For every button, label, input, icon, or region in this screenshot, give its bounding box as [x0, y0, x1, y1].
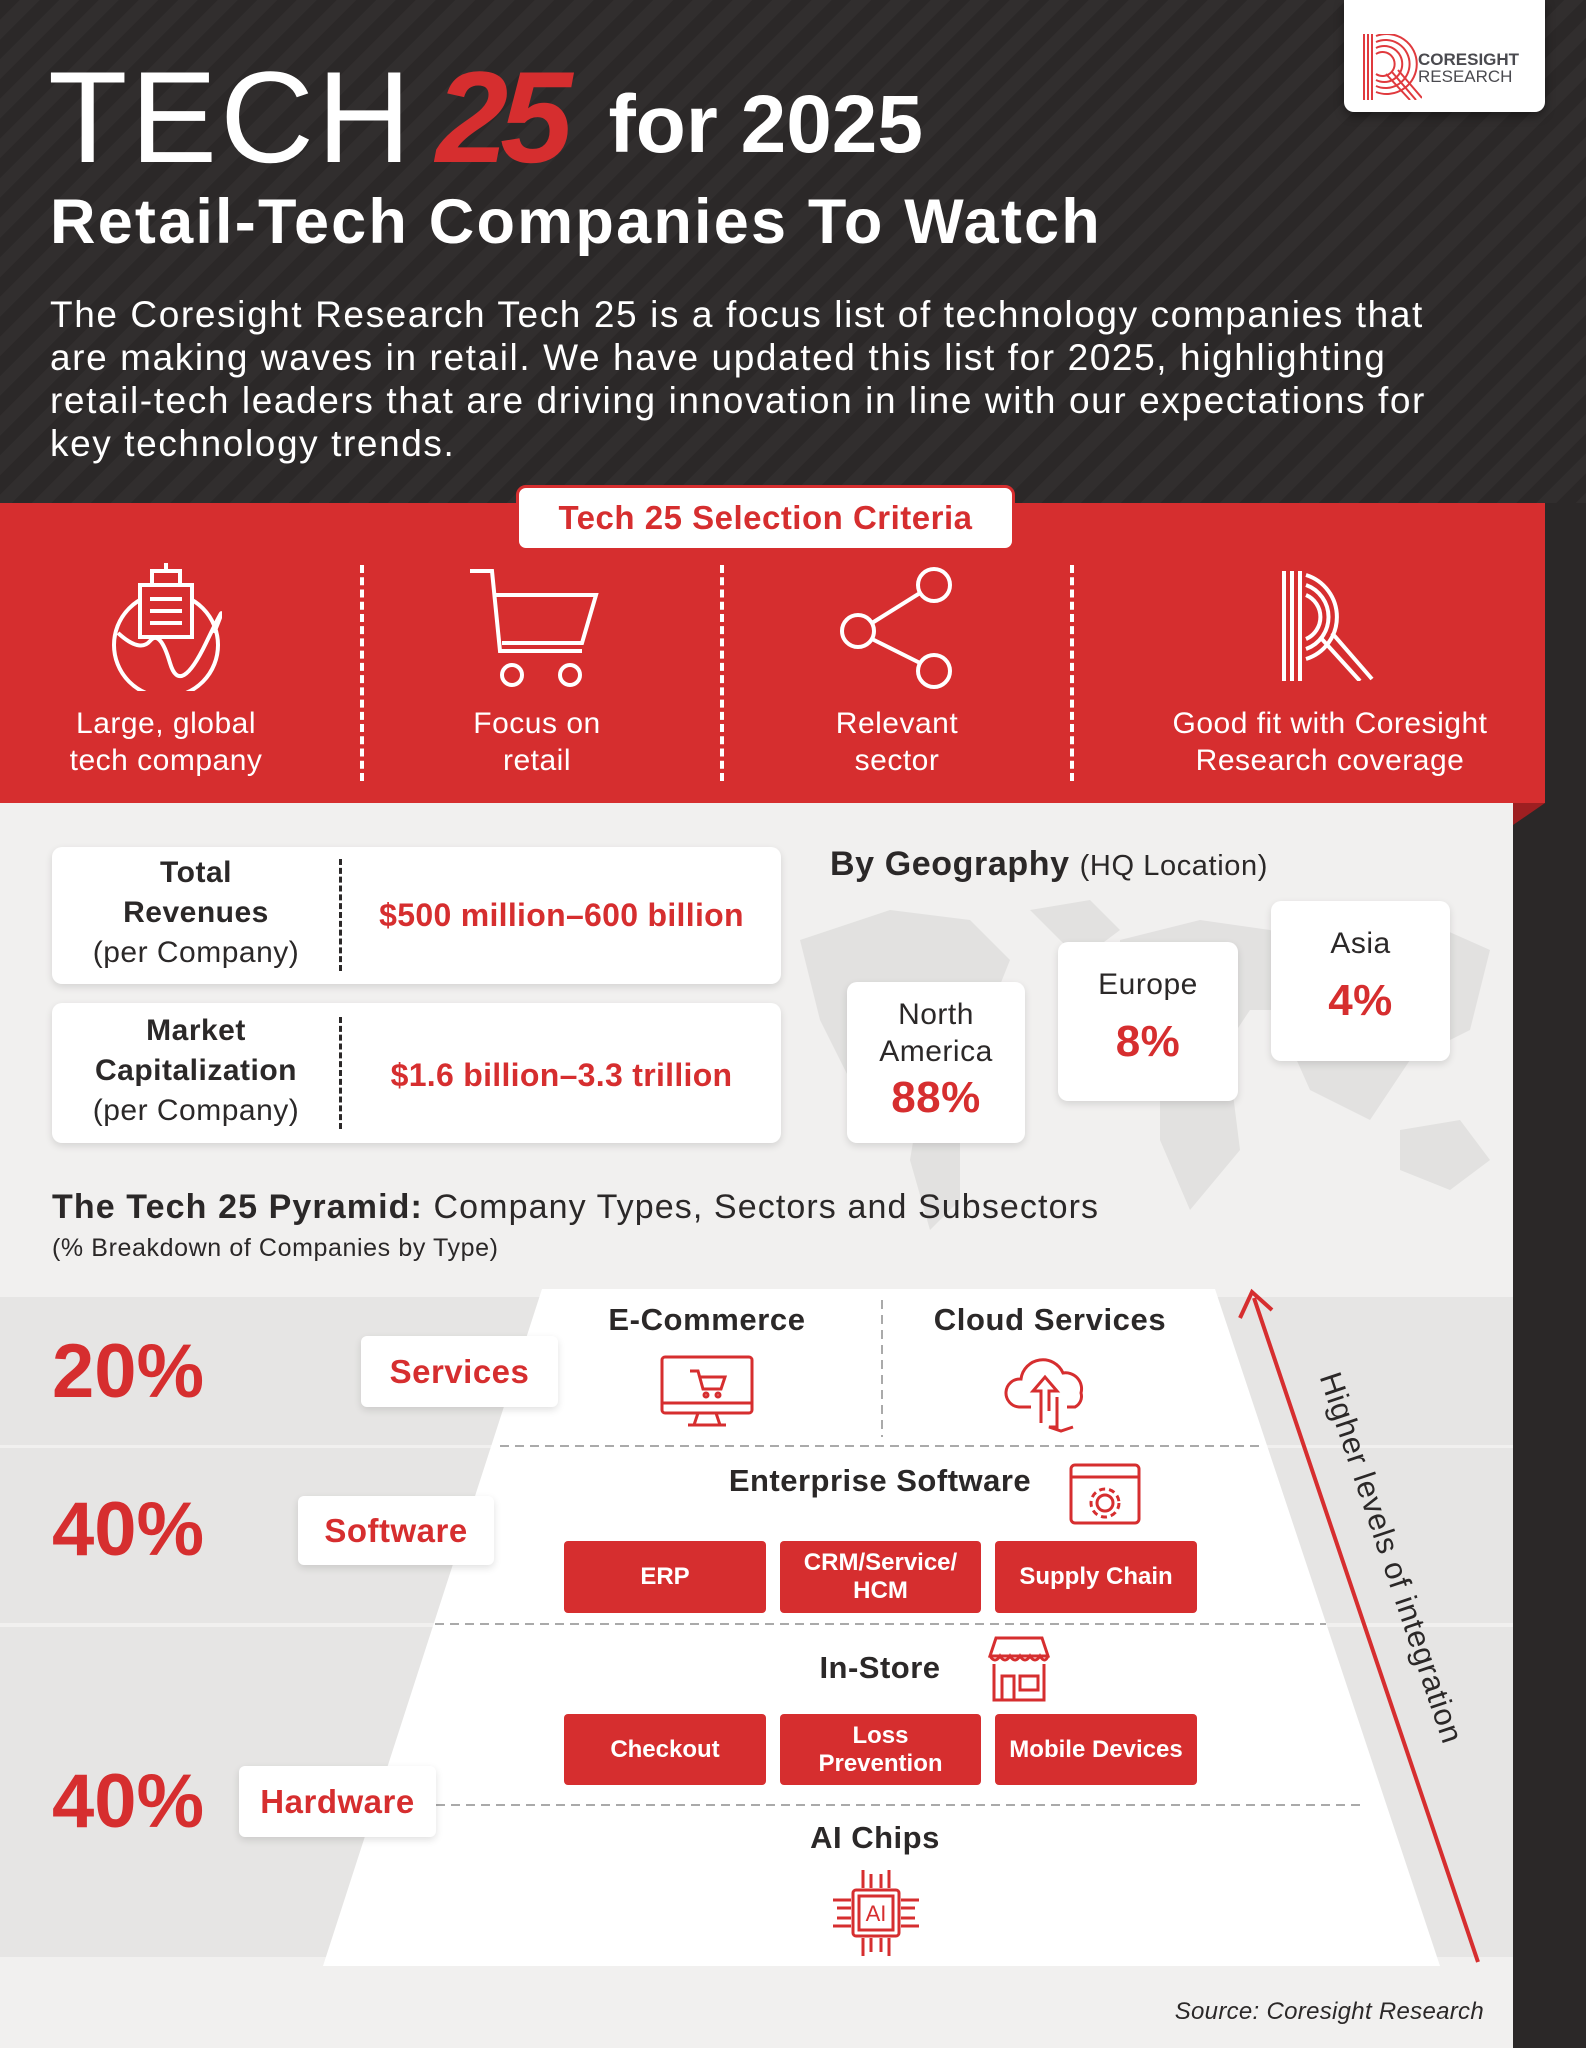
text: (% Breakdown of Companies by Type): [52, 1234, 499, 1262]
card: market cap: (per Company): [93, 1094, 299, 1127]
geo card: europe: Europe: [1098, 968, 1198, 1001]
criteria heading: Tech 25 Selection Criteria: [558, 499, 973, 536]
intro paragraph: The Coresight Research Tech 25 is a focus list of technology companies that: [50, 294, 1424, 335]
geo card: europe: 8%: [1116, 1017, 1180, 1066]
card: total revenues: (per Company): [93, 936, 299, 969]
text: Enterprise Software: [729, 1463, 1031, 1498]
intro paragraph: retail-tech leaders that are driving innovation in line with our expectations for: [50, 380, 1426, 421]
panel: selection criteria: retail: [503, 744, 571, 777]
panel: selection criteria: sector: [855, 744, 939, 777]
text: Hardware: [260, 1782, 415, 1820]
text: Prevention: [818, 1750, 943, 1776]
card: total revenues: Revenues: [123, 896, 269, 929]
geo card: europe: [1058, 942, 1238, 1101]
header background: [0, 0, 1586, 503]
text: Services: [390, 1352, 529, 1390]
light content area: [0, 803, 1513, 2048]
text: Supply Chain: [1019, 1563, 1173, 1590]
geo card: north america: America: [879, 1035, 993, 1068]
text: Cloud Services: [934, 1302, 1166, 1337]
row: software: 40%: [52, 1487, 204, 1572]
text: E-Commerce: [608, 1302, 806, 1337]
text: CRM/Service/: [804, 1549, 957, 1576]
icon: AI chip: AI: [866, 1901, 886, 1926]
icon: coresight R: [1282, 571, 1374, 681]
intro paragraph: key technology trends.: [50, 423, 455, 464]
world map: [800, 900, 1490, 1230]
card: total revenues: $500 million–600 billion: [379, 897, 744, 933]
intro paragraph: are making waves in retail. We have updated this list for 2025, highlighting: [50, 337, 1386, 378]
icon: share: [840, 567, 952, 689]
text: ERP: [640, 1563, 690, 1590]
source: Source: Coresight Research: [1175, 1998, 1484, 2025]
geo card: north america: [847, 982, 1025, 1143]
geography heading: By Geography (HQ Location): [830, 845, 1268, 883]
panel: selection criteria: [0, 503, 1545, 803]
text: AI Chips: [810, 1820, 940, 1855]
geo card: asia: Asia: [1330, 927, 1391, 960]
text: Mobile Devices: [1009, 1736, 1183, 1763]
geo card: north america: 88%: [891, 1073, 981, 1122]
geo card: asia: 4%: [1328, 976, 1393, 1025]
card: market cap: $1.6 billion–3.3 trillion: [391, 1057, 732, 1093]
text: Checkout: [610, 1736, 720, 1763]
icon: AI chip: [833, 1870, 919, 1956]
geo card: north america: North: [898, 998, 974, 1031]
subtitle: Retail-Tech Companies To Watch: [50, 187, 1102, 257]
card: total revenues: [52, 847, 781, 984]
logo: [1344, 0, 1545, 112]
panel: selection criteria: Good fit with Coresight: [1172, 707, 1487, 740]
text: Higher levels of integration: [1313, 1368, 1470, 1748]
row: hardware: 40%: [52, 1759, 204, 1844]
title: TECH25 for 2025: [48, 44, 923, 190]
icon: cloud: [1004, 1358, 1084, 1433]
icon: storefront: [988, 1636, 1050, 1702]
icon: monitor cart: [660, 1356, 754, 1426]
text: Loss: [852, 1722, 908, 1749]
text: HCM: [853, 1577, 908, 1604]
card: market cap: [52, 1003, 781, 1143]
panel: selection criteria: Research coverage: [1196, 744, 1464, 777]
criteria heading: [516, 485, 1015, 551]
row: services: 20%: [52, 1329, 204, 1414]
card: total revenues: Total: [160, 856, 232, 889]
row: in-store: In-Store: [819, 1650, 941, 1685]
card: market cap: Market: [146, 1014, 246, 1047]
text: Software: [324, 1512, 468, 1548]
intro paragraph: [50, 294, 1426, 464]
panel: selection criteria: Focus on: [473, 707, 601, 740]
row bands: [0, 1297, 1513, 1445]
panel: selection criteria: tech company: [70, 744, 262, 777]
icon: browser gear: [1070, 1464, 1140, 1524]
panel: selection criteria: Relevant: [836, 707, 958, 740]
logo: RESEARCH: [1418, 67, 1512, 86]
icon: globe building: [112, 563, 222, 691]
card: market cap: Capitalization: [95, 1054, 297, 1087]
panel: selection criteria: Large, global: [76, 707, 256, 740]
logo: CORESIGHT: [1418, 50, 1519, 69]
icon: cart: [470, 569, 599, 687]
pyramid heading: The Tech 25 Pyramid: Company Types, Sectors and Subsectors: [52, 1188, 1099, 1226]
geo card: asia: [1271, 901, 1450, 1061]
